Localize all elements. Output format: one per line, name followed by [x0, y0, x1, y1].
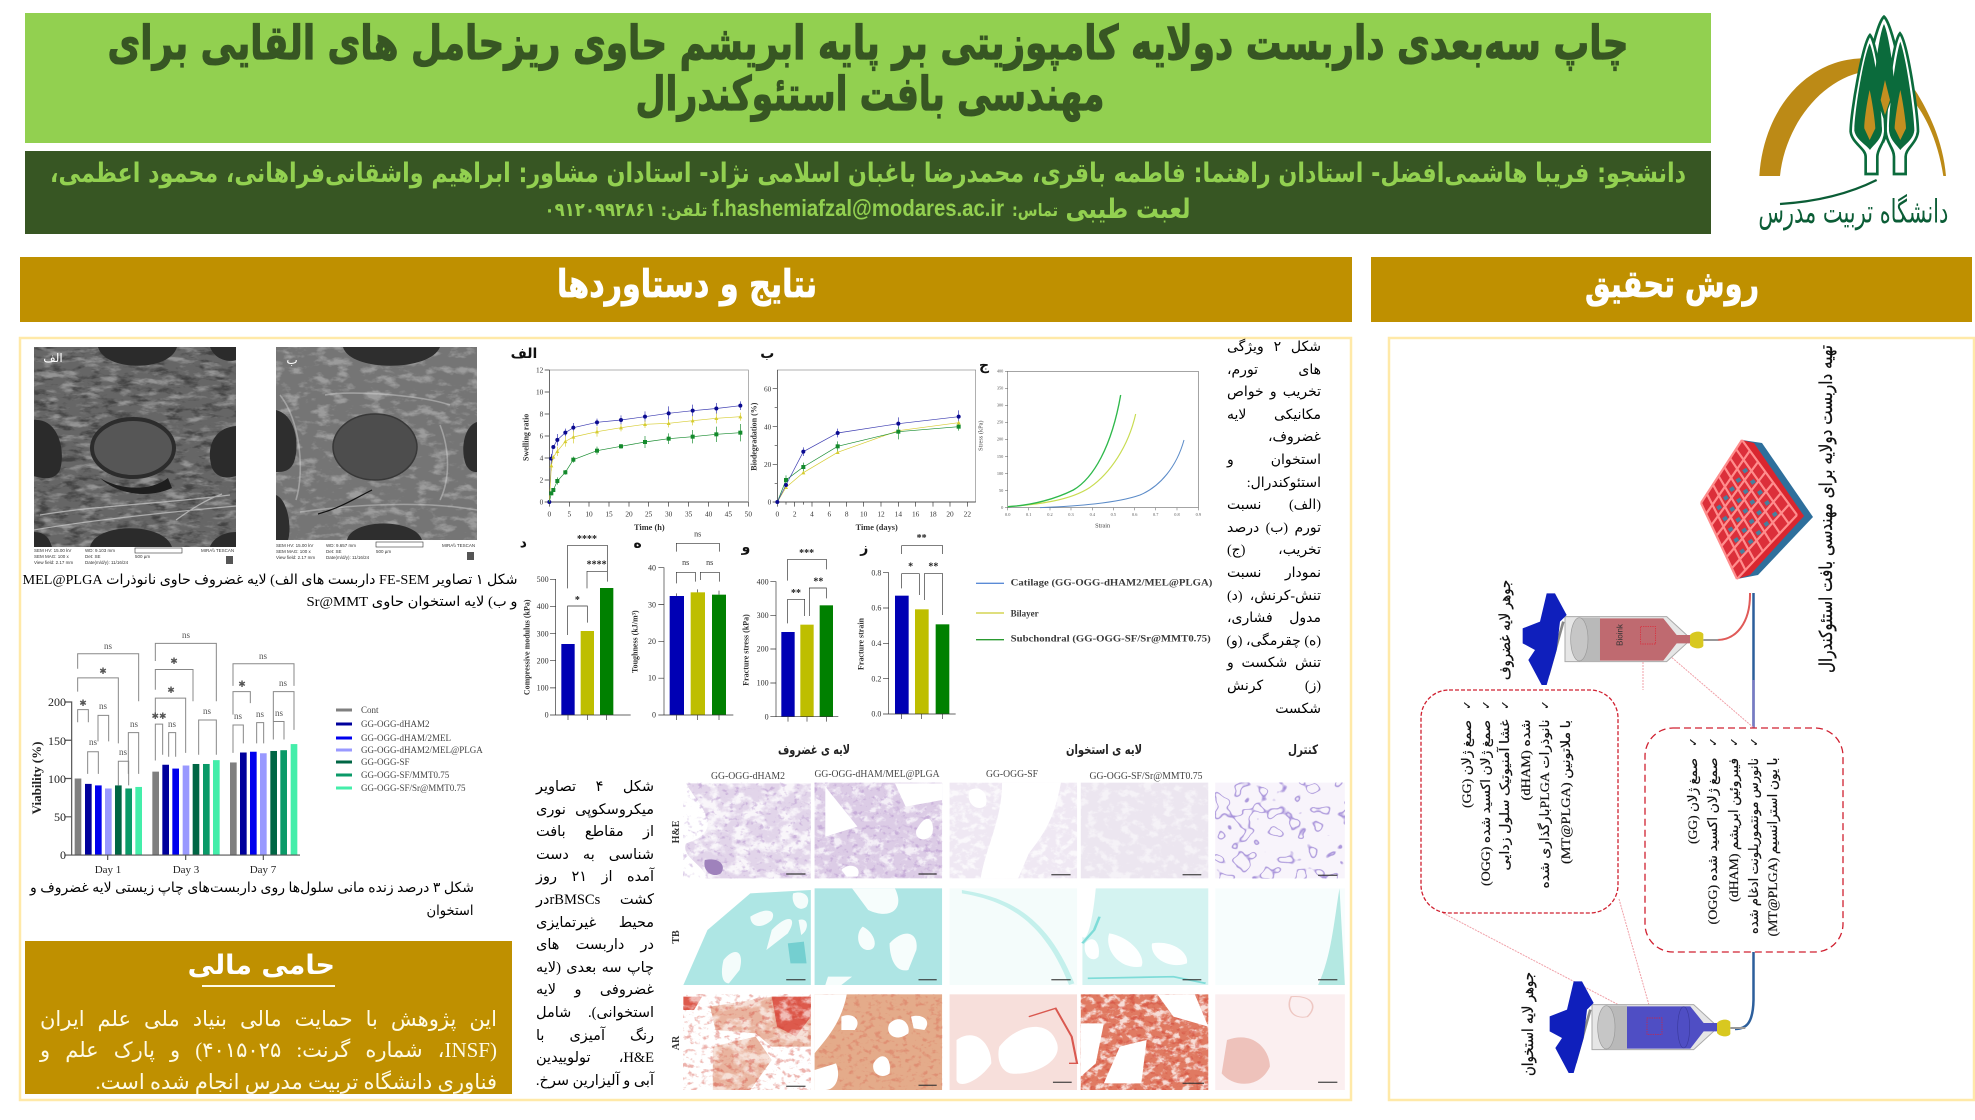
- chart: swelling ratio: 40: [705, 510, 713, 519]
- viability significance labels: ns: [104, 641, 112, 651]
- histology header labels: کنترل: [1288, 743, 1318, 758]
- chart: toughness: 40: [648, 563, 656, 572]
- connector lines: [1443, 644, 1754, 1015]
- chart: biodegradation: 18: [929, 510, 937, 519]
- chart: biodegradation: 14: [895, 510, 902, 519]
- chart: stress-strain curves: 0.4: [1090, 512, 1096, 517]
- authors banner: ۰۹۱۲۰۹۹۲۸۶۱: [544, 199, 656, 221]
- chart: stress-strain curves: Strain: [1095, 523, 1111, 530]
- histology column labels: [711, 769, 1202, 782]
- viability significance labels: ✱: [238, 679, 246, 689]
- chart: toughness: ns: [682, 558, 689, 567]
- caption: figure 2: غضروف،: [1268, 430, 1321, 445]
- viability significance labels: ✱: [170, 656, 178, 666]
- method title (rotated): تهیه داربست دولایه برای مهندسی بافت استئوکندرال: [1816, 345, 1837, 673]
- viability legend: GG-OGG-dHAM2: [361, 719, 430, 729]
- chart: biodegradation: 0: [768, 498, 772, 507]
- chart: fracture strain: 0.2: [871, 674, 881, 683]
- chart: swelling ratio: 50: [745, 510, 752, 519]
- viability axis labels: Viability (%): [29, 742, 44, 814]
- scaffold grid lines: [1701, 440, 1797, 579]
- caption: figure 4: از مقاطع بافت: [536, 824, 654, 840]
- chart: stress-strain curves: 0: [1001, 505, 1003, 510]
- text: cartilage ink composition: نانوذرات PLGAبارگذاری شده: [1537, 720, 1553, 888]
- caption: figure 4: غضروفی و لایه: [536, 982, 654, 998]
- chart: biodegradation: Biodegradation (%): [750, 402, 759, 471]
- chart: swelling ratio: 6: [540, 432, 544, 441]
- sponsor text: فناوری دانشگاه تربیت مدرس انجام شده است.: [95, 1070, 497, 1094]
- SEM info strip B: Date(m/d/y): 11/16/24: [326, 555, 370, 560]
- chart: fracture strain: 0.4: [871, 639, 881, 648]
- chart: swelling ratio: 10: [585, 510, 593, 519]
- caption: figure 2: مدول فشاری،: [1227, 611, 1321, 626]
- viability significance labels: ns: [182, 630, 190, 640]
- chart: fracture strain: 0.8: [871, 568, 881, 577]
- caption: figure 2: مکانیکی لایه: [1227, 408, 1321, 423]
- chart: fracture strain: 0.6: [871, 604, 881, 613]
- chart: stress-strain curves: 0.0: [1005, 512, 1010, 517]
- heading: results: نتایج و دستاوردها: [557, 262, 817, 307]
- chart: stress-strain curves: 0.6: [1132, 512, 1138, 517]
- chart: fracture strain: ز: [859, 541, 868, 557]
- caption: figure 3: [29, 881, 474, 919]
- chart: compressive modulus: 500: [537, 575, 549, 584]
- caption: figure 4: آبی و آلیزارین سرخ.: [536, 1073, 654, 1089]
- viability legend: GG-OGG-dHAM/2MEL: [361, 733, 451, 743]
- chart: biodegradation: 8: [845, 510, 849, 519]
- viability significance labels: ✱: [99, 666, 107, 676]
- viability axis labels: [29, 695, 277, 876]
- box: cartilage ink: [1421, 690, 1618, 913]
- SEM image A: [34, 347, 236, 547]
- caption: figure 2: تخریب، (ج): [1227, 543, 1321, 558]
- logo arch: [1759, 58, 1946, 176]
- viability axis labels: 200: [48, 695, 66, 709]
- SEM info strip A: SEM MAG: 100 x: [34, 554, 70, 559]
- authors banner: تماس:: [1012, 201, 1058, 221]
- histology row labels: TB: [671, 930, 682, 944]
- viability significance labels: ns: [259, 651, 267, 661]
- viability significance labels: ns: [119, 747, 127, 757]
- text: cartilage ink composition: ✓: [1481, 700, 1493, 710]
- chart: biodegradation: 22: [964, 510, 971, 519]
- caption: figure 2: های تورم،: [1227, 363, 1321, 378]
- chart: fracture strain: *: [908, 561, 913, 572]
- text: bone ink composition: با یون استرانسیم (MT@PLGA): [1765, 758, 1781, 936]
- chart: toughness: ns: [706, 558, 713, 567]
- panel: results frame: [20, 338, 1351, 1100]
- authors banner: [25, 151, 1711, 234]
- chart: toughness: Toughness (kJ/m³): [631, 610, 640, 673]
- viability axis labels: 50: [54, 810, 66, 824]
- SEM info strip A: WD: 9.103 mm: [85, 548, 115, 553]
- caption: figure 4: آمده از ۲۱ روز: [536, 869, 654, 885]
- panel: financial sponsor: [25, 941, 512, 1094]
- chart: stress-strain curves: 350: [997, 386, 1003, 391]
- text: cartilage ink composition: صمغ ژلان اکسید شده (OGG): [1478, 720, 1494, 886]
- viability significance labels: ns: [256, 709, 264, 719]
- chart: compressive modulus: *: [575, 595, 580, 606]
- chart: swelling ratio: 2: [540, 476, 544, 485]
- heading: method: روش تحقیق: [1585, 262, 1759, 307]
- caption: figure 3: شکل ۳ درصد زنده مانی سلول‌ها روی داربست‌های چاپ زیستی لایه غضروف و: [29, 881, 474, 896]
- histology header labels: لایه ی استخوان: [1066, 743, 1142, 758]
- bone syringe: [1550, 981, 1745, 1073]
- SEM info strip B: SEM MAG: 100 x: [276, 549, 312, 554]
- viability significance labels: ns: [279, 678, 287, 688]
- SEM info strip A: View field: 2.17 mm: [34, 560, 73, 565]
- caption: figure 4: میکروسکوپی نوری: [536, 802, 654, 818]
- chart: swelling ratio: 0: [540, 498, 544, 507]
- histology column labels: GG-OGG-dHAM/MEL@PLGA: [814, 769, 940, 780]
- caption: figure 2: تخریب و خواص: [1227, 385, 1321, 400]
- caption: figure 2: (ز) کرنش: [1227, 679, 1321, 694]
- chart: biodegradation: 20: [764, 460, 772, 469]
- sponsor heading: حامی مالی: [188, 950, 335, 981]
- histology micrograph grid: [683, 783, 1345, 1090]
- chart: fracture stress: 0: [765, 712, 769, 721]
- text: cartilage ink composition: غشا آمنیوتیک سلول زدایی: [1496, 719, 1513, 870]
- text: bone ink composition: ✓: [1708, 737, 1720, 747]
- logo trees: [1851, 17, 1918, 174]
- chart: fracture stress: Fracture stress (kPa): [742, 614, 751, 686]
- chart: swelling ratio: 5: [567, 510, 571, 519]
- chart: swelling ratio: Time (h): [634, 523, 665, 532]
- text: bone ink composition: ✓: [1749, 737, 1761, 747]
- chart: fracture strain: **: [917, 533, 927, 544]
- chart: stress-strain curves: 0.5: [1111, 512, 1116, 517]
- viability significance labels: ns: [130, 719, 138, 729]
- text: cartilage ink composition: ✓: [1500, 700, 1512, 710]
- chart: stress-strain curves: 0.1: [1026, 512, 1031, 517]
- chart: swelling ratio: 4: [540, 454, 544, 463]
- caption: figure 3: استخوان: [426, 904, 474, 919]
- chart: biodegradation: 4: [810, 510, 814, 519]
- H&E row: [683, 783, 1345, 878]
- caption: figure 2: شکست: [1275, 702, 1321, 716]
- chart: fracture strain: **: [928, 561, 938, 572]
- chart: stress-strain curves: 400: [997, 369, 1003, 374]
- caption: figure 1: شکل ۱ تصاویر FE-SEM داربست های الف) لایه غضروف حاوی نانوذرات MEL@PLGA: [22, 573, 518, 588]
- text: bone ink composition: ✓: [1729, 737, 1741, 747]
- scaffold grid cells: [1718, 469, 1776, 553]
- caption: figure 2: (ه) چقرمگی، (و): [1226, 634, 1321, 649]
- chart: biodegradation: 16: [912, 510, 920, 519]
- viability axis labels: Day 1: [95, 864, 121, 876]
- chart: stress-strain curves: Stress (kPa): [978, 420, 985, 451]
- caption: figure 1: و ب) لایه استخوان حاوی Sr@MMT: [306, 595, 518, 610]
- chart: fracture stress: [741, 539, 838, 722]
- chart: swelling ratio: [511, 346, 752, 532]
- authors banner: تلفن:: [660, 201, 708, 221]
- logo wordmark: [1780, 180, 1877, 204]
- histology header labels: لایه ی غضروف: [778, 743, 850, 758]
- viability axes: [65, 702, 300, 860]
- SEM info strip A: MIRA\\ TESCAN: [201, 548, 234, 553]
- chart: swelling ratio: 25: [645, 510, 653, 519]
- text: bone ink composition: صمغ ژلان اکسید شده (OGG): [1705, 758, 1721, 924]
- viability legend: GG-OGG-SF: [361, 757, 410, 767]
- SEM info strip B: WD: 9.657 mm: [326, 543, 356, 548]
- chart: compressive modulus: 400: [537, 602, 549, 611]
- tubing: [1717, 593, 1754, 1029]
- chart: toughness: [631, 529, 733, 720]
- chart: compressive modulus: 100: [537, 683, 549, 692]
- caption: figure 4: استخوانی). شامل: [536, 1005, 654, 1021]
- chart: toughness: 20: [648, 637, 656, 646]
- text: cartilage ink composition: با ملاتونین (MT@PLGA): [1558, 720, 1574, 864]
- chart: swelling ratio: الف: [511, 346, 537, 362]
- chart: compressive modulus: 200: [537, 656, 549, 665]
- chart: fracture stress: 300: [757, 611, 769, 620]
- SEM info strip B: 500 µm: [376, 549, 391, 554]
- caption: figure 4: کشت rBMSCsدر: [536, 892, 654, 908]
- chart: fracture stress: **: [813, 576, 823, 587]
- text: bone ink composition: نانورس مونتموریلونت ادغام شده: [1746, 758, 1762, 934]
- viability significance labels: [79, 630, 287, 757]
- text: cartilage ink composition: [1459, 700, 1574, 888]
- histology scale bars: [786, 874, 1337, 1086]
- chart: biodegradation: 12: [877, 510, 885, 519]
- chart: fracture stress: 200: [757, 645, 769, 654]
- chart: biodegradation: 40: [764, 422, 772, 431]
- viability significance labels: ✱: [167, 685, 175, 695]
- chart: biodegradation: Time (days): [856, 523, 898, 532]
- caption: figure 2: استخوان و: [1227, 453, 1321, 468]
- SEM info strip B: MIRA\\ TESCAN: [442, 543, 475, 548]
- chart: compressive modulus: ****: [577, 534, 597, 545]
- viability bars: [75, 762, 237, 855]
- chart: toughness: 30: [648, 600, 656, 609]
- viability significance labels: ns: [234, 711, 242, 721]
- chart: fracture stress: ***: [799, 548, 814, 559]
- viability axis labels: 0: [60, 848, 66, 862]
- caption: figure 2: (الف) نسبت: [1227, 498, 1321, 513]
- SEM info strip B: [276, 542, 475, 560]
- text: bone ink composition: ✓: [1688, 737, 1700, 747]
- chart: biodegradation: ب: [760, 346, 774, 362]
- legend: material curves: Catilage (GG-OGG-dHAM2/MEL@PLGA): [1011, 577, 1212, 587]
- chart: toughness: 10: [648, 674, 656, 683]
- text: bone ink composition: صمغ ژلان (GG): [1685, 758, 1701, 844]
- viability significance labels: ns: [99, 701, 107, 711]
- viability axis labels: Day 3: [173, 864, 200, 876]
- chart: stress-strain curves: 100: [997, 471, 1003, 476]
- box: bone ink: [1645, 728, 1843, 952]
- chart: swelling ratio: 10: [536, 388, 544, 397]
- chart: stress-strain curves: 0.8: [1174, 512, 1180, 517]
- title banner: [25, 13, 1711, 143]
- method diagram: scaffold: [1701, 440, 1813, 579]
- chart: swelling ratio: 12: [536, 366, 544, 375]
- chart: toughness: 0: [652, 711, 656, 720]
- sponsor text: [39, 1007, 497, 1094]
- chart: compressive modulus: 300: [537, 629, 549, 638]
- histology column labels: GG-OGG-dHAM2: [711, 771, 785, 782]
- viability significance labels: ns: [89, 737, 97, 747]
- caption: figure 2: تنش-کرنش، (د): [1227, 589, 1321, 604]
- caption: figure 4: محیط غیرتمایزی: [536, 915, 654, 931]
- caption: figure 2: شکل ۲ ویژگی: [1227, 340, 1321, 355]
- cartilage syringe: Bioink: [1615, 624, 1624, 646]
- chart: stress-strain curves: 0.9: [1196, 512, 1201, 517]
- viability significance labels: ns: [275, 708, 283, 718]
- AR row: [683, 994, 1345, 1090]
- heading: results: [20, 257, 1352, 322]
- viability axis labels: 150: [48, 734, 66, 748]
- caption: figure 2: تورم (ب) درصد: [1227, 521, 1321, 536]
- SEM info strip A: [34, 548, 234, 565]
- chart: fracture stress: 100: [757, 679, 769, 688]
- caption: figure 4: [535, 779, 655, 1089]
- chart: biodegradation: 20: [946, 510, 954, 519]
- label: cartilage ink: جوهر لایه غضروف: [1496, 580, 1514, 680]
- chart: swelling ratio: 35: [685, 510, 693, 519]
- caption: figure 2: نمودار نسبت: [1227, 566, 1321, 581]
- SEM label A: الف: [43, 351, 63, 365]
- viability significance labels: ns: [168, 719, 176, 729]
- viability significance labels: ns: [203, 706, 211, 716]
- SEM info strip A: Date(m/d/y): 11/16/24: [85, 560, 129, 565]
- chart: fracture strain: 0.0: [871, 710, 881, 719]
- SEM info strip B: SEM HV: 15.00 kV: [276, 543, 313, 548]
- histology header labels: [778, 743, 1318, 758]
- caption: figure 4: شناسی به دست: [536, 847, 654, 863]
- chart: compressive modulus: Compressive modulus (kPa): [522, 599, 531, 695]
- chart: swelling ratio: 20: [625, 510, 633, 519]
- text: cartilage ink composition: شده (dHAM): [1518, 720, 1533, 800]
- chart: stress-strain curves: 0.7: [1153, 512, 1159, 517]
- chart: swelling ratio: 0: [547, 510, 551, 519]
- caption: figure 1: [22, 573, 518, 610]
- histology column labels: GG-OGG-SF: [986, 769, 1038, 780]
- title banner: مهندسی بافت استئوکندرال: [636, 67, 1104, 122]
- chart: fracture strain: [856, 533, 956, 719]
- caption: figure 4: در داربست های: [536, 937, 654, 953]
- text: cartilage ink composition: صمغ ژلان (GG): [1459, 720, 1475, 808]
- SEM info strip B: Det: SE: [326, 549, 342, 554]
- text: bone ink composition: فیبروئین ابریشم (dHAM): [1726, 758, 1742, 902]
- chart: toughness: ه: [634, 535, 642, 551]
- charts: swelling, degradation and mechanical bars: [511, 346, 976, 722]
- viability legend: Cont: [361, 705, 379, 715]
- chart: compressive modulus: [520, 534, 631, 720]
- legend: material curves: Subchondral (GG-OGG-SF/Sr@MMT0.75): [1011, 634, 1211, 644]
- viability legend: [336, 705, 483, 793]
- viability legend: GG-OGG-SF/MMT0.75: [361, 770, 450, 780]
- chart: stress-strain curves: 0.2: [1047, 512, 1053, 517]
- SEM info strip B: View field: 2.17 mm: [276, 555, 315, 560]
- SEM info strip A: SEM HV: 15.00 kV: [34, 548, 71, 553]
- SEM info strip A: 500 µm: [135, 554, 150, 559]
- text: cartilage ink composition: ✓: [1462, 700, 1474, 710]
- panel: method frame: [1389, 338, 1974, 1100]
- caption: figure 4: شکل ۴ تصاویر: [536, 779, 654, 795]
- caption: figure 4: چاپ سه بعدی (لایه: [536, 960, 654, 976]
- chart: biodegradation: 0: [775, 510, 779, 519]
- histology row labels: H&E: [671, 820, 682, 843]
- histology row labels: AR: [671, 1035, 682, 1050]
- logo: Tarbiat Modares University: [1758, 17, 1948, 231]
- chart: biodegradation: 6: [827, 510, 831, 519]
- caption: figure 2: تنش شکست و: [1227, 656, 1321, 671]
- sponsor text: (INSF، شماره گرنت: ۴۰۱۵۰۲۵) و پارک علم و: [40, 1038, 497, 1062]
- label: bone ink: جوهر لایه استخوان: [1519, 972, 1537, 1076]
- chart: compressive modulus: د: [520, 535, 527, 551]
- histology column labels: GG-OGG-SF/Sr@MMT0.75: [1090, 771, 1202, 782]
- chart: stress-strain curves: ج: [979, 357, 990, 373]
- histology row labels: [671, 820, 682, 1050]
- significance brackets: [78, 643, 294, 785]
- caption: figure 2: [1226, 338, 1321, 716]
- chart: swelling ratio: 30: [665, 510, 673, 519]
- SEM info strip A: Det: SE: [85, 554, 101, 559]
- chart: swelling ratio: 15: [605, 510, 613, 519]
- heading: method: [1371, 257, 1972, 322]
- chart: fracture stress: 400: [757, 577, 769, 586]
- chart: stress-strain curves: 250: [997, 420, 1003, 425]
- chart: swelling ratio: 45: [725, 510, 732, 519]
- chart: fracture stress: **: [791, 588, 801, 599]
- chart: fracture stress: و: [741, 539, 750, 555]
- viability significance labels: ✱✱: [151, 711, 167, 721]
- chart: swelling ratio: 8: [540, 410, 544, 419]
- authors banner: لعبت طیبی: [1066, 194, 1190, 225]
- viability axis labels: 100: [48, 772, 66, 786]
- viability legend: GG-OGG-SF/Sr@MMT0.75: [361, 783, 466, 793]
- text: cartilage ink composition: ✓: [1540, 700, 1552, 710]
- SEM image B: [276, 347, 477, 540]
- chart: biodegradation: 10: [860, 510, 868, 519]
- legend: material curves: [976, 577, 1212, 644]
- chart: fracture strain: Fracture strain: [856, 617, 865, 670]
- chart: stress-strain curves: 0.3: [1068, 512, 1074, 517]
- authors banner: f.hashemiafzal@modares.ac.ir: [712, 195, 1004, 221]
- chart: biodegradation: [750, 346, 976, 532]
- chart: cell viability bars: [65, 643, 300, 860]
- SEM label B: ب: [286, 353, 298, 367]
- chart: swelling ratio: Swelling ratio: [522, 414, 531, 461]
- viability legend: GG-OGG-dHAM2/MEL@PLGA: [361, 745, 483, 755]
- text: bone ink composition: [1685, 737, 1781, 936]
- caption: figure 2: استئوکندرال:: [1247, 476, 1321, 491]
- viability axis labels: Day 7: [250, 864, 277, 876]
- caption: figure 4: H&E، تولوییدین: [536, 1050, 654, 1066]
- viability significance labels: ✱: [79, 698, 87, 708]
- chart: stress-strain curves: 300: [997, 403, 1003, 408]
- chart: toughness: ns: [694, 529, 701, 538]
- chart: compressive modulus: ****: [587, 560, 607, 571]
- TB row: [683, 888, 1345, 985]
- chart: stress-strain curves: 150: [997, 454, 1003, 459]
- chart: biodegradation: 60: [764, 384, 772, 393]
- sponsor text: این پژوهش با حمایت مالی بنیاد ملی علم ایران: [40, 1007, 497, 1031]
- chart: compressive modulus: 0: [545, 711, 549, 720]
- cartilage syringe: [1523, 593, 1718, 685]
- chart: stress-strain curves: 50: [999, 488, 1003, 493]
- caption: figure 4: رنگ آمیزی با: [536, 1028, 654, 1044]
- chart: stress-strain curves: [978, 357, 1201, 530]
- chart: biodegradation: 2: [793, 510, 797, 519]
- chart: stress-strain curves: 200: [997, 437, 1003, 442]
- legend: material curves: Bilayer: [1011, 609, 1039, 619]
